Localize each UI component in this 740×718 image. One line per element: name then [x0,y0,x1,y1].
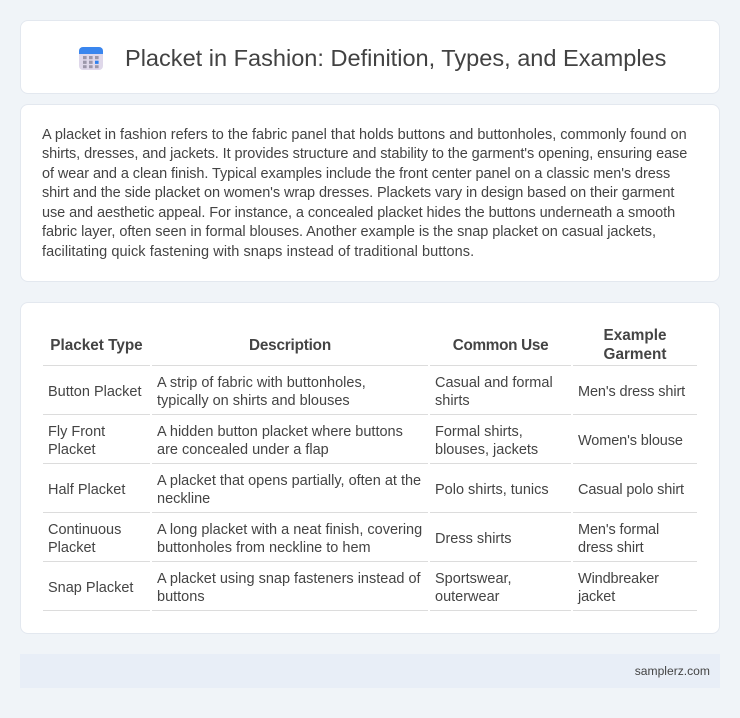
table: placket types: Women's blouse [578,432,683,448]
table: placket types: Sportswear, [435,570,512,586]
table: placket types: Fly Front [48,424,105,440]
table: placket types [43,327,697,611]
text block: definition: shirt and the side placket on women's wrap dresses. Plackets vary in design based on their garment [42,185,674,201]
table: placket types: typically on shirts and blouses [157,392,350,408]
table: placket types: dress shirt [578,540,644,556]
table: placket types: Placket [48,540,96,556]
footer [20,654,720,688]
table: placket types: Placket [48,442,96,458]
panel: header [20,20,720,94]
text block: definition [42,127,687,260]
table: placket types: blouses, jackets [435,442,538,458]
table: placket types: Description [249,336,331,354]
table: placket types: A strip of fabric with buttonholes, [157,374,366,390]
table: placket types: Men's dress shirt [578,384,685,400]
table: placket types: Polo shirts, tunics [435,482,549,498]
table: placket types: jacket [578,588,615,604]
text block: definition: fabric layer, often seen in formal blouses. Another example is the snap placket on casual jackets, [42,224,656,240]
text block: definition: use and aesthetic appeal. For instance, a concealed placket hides the buttons underneath a smooth [42,205,675,221]
table: placket types: buttons [157,588,205,604]
table: placket types: Placket Type [50,336,143,354]
title: Placket in Fashion: Definition, Types, and Examples [125,45,666,71]
table: placket types: Button Placket [48,384,142,400]
table: placket types: Continuous [48,522,121,538]
table: placket types: Windbreaker [578,570,659,586]
panel: introduction [20,104,720,282]
table: placket types: outerwear [435,588,499,604]
table: placket types: shirts [435,392,470,408]
footer source text: samplerz.com [635,664,710,678]
table: placket types: are concealed under a flap [157,442,329,458]
panel: placket types table [20,302,720,634]
text block: definition: facilitating quick fastening with snaps instead of traditional buttons. [42,244,474,260]
table: placket types: buttonholes from neckline to hem [157,540,371,556]
table: placket types: Common Use [453,336,548,354]
icon: calendar [79,47,103,70]
table: placket types: Half Placket [48,482,125,498]
table: placket types: Men's formal [578,522,659,538]
text block: definition: A placket in fashion refers to the fabric panel that holds buttons and buttonholes, commonly found on [42,127,687,143]
table: placket types: neckline [157,490,210,506]
table: placket types: Casual and formal [435,374,553,390]
text block: definition: of wear and a clean finish. Typical examples include the front center panel on a classic men's dress [42,166,670,182]
table: placket types: Dress shirts [435,530,512,546]
table: placket types: Formal shirts, [435,424,523,440]
table: placket types: Example [604,327,666,344]
table: placket types: Snap Placket [48,580,133,596]
table: placket types: A long placket with a neat finish, covering [157,522,422,538]
table: placket types: Garment [604,346,666,363]
table: placket types: A placket using snap fasteners instead of [157,570,421,586]
text block: definition: shirts, dresses, and jackets. It provides structure and stability to the garment's opening, ensuring ease [42,146,687,162]
table: placket types: A hidden button placket where buttons [157,424,403,440]
table: placket types: Casual polo shirt [578,482,684,498]
table: placket types: A placket that opens partially, often at the [157,472,421,488]
